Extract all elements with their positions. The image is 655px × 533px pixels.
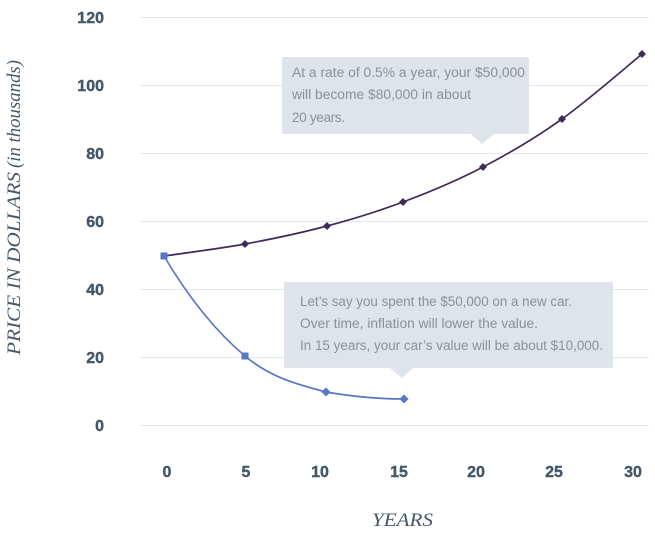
callout: savings [282,57,529,144]
x axis title: YEARS [372,510,434,531]
line series: savings growth [164,50,646,256]
y axis labels [77,10,104,435]
callout: car [284,282,613,378]
y axis labels: 20 [86,350,104,367]
x axis labels [163,464,642,481]
x axis labels: 5 [242,464,251,481]
x axis labels: 15 [390,464,408,481]
y axis title [4,60,25,356]
y axis labels: 40 [86,282,104,299]
callout: car: Over time, inflation will lower the value. [300,316,538,331]
y axis title: (in thousands) [4,60,25,168]
callout: car: In 15 years, your car’s value will be about $10,000. [300,338,603,353]
line series: car value decline [160,252,408,404]
x axis labels: 20 [467,464,485,481]
x axis labels: 25 [545,464,563,481]
callout: savings: will become $80,000 in about [291,87,471,102]
x axis labels: 0 [163,464,172,481]
callout: savings: At a rate of 0.5% a year, your $50,000 [292,65,525,80]
y axis labels: 100 [77,78,104,95]
x axis labels: 30 [624,464,642,481]
y axis labels: 80 [86,146,104,163]
y axis labels: 120 [77,10,104,27]
callout: car: Let’s say you spent the $50,000 on a new car. [300,294,572,309]
y axis title: PRICE IN DOLLARS [4,171,25,356]
y axis labels: 60 [86,214,104,231]
callout: savings: 20 years. [292,110,345,125]
y axis labels: 0 [95,418,104,435]
x axis labels: 10 [311,464,329,481]
